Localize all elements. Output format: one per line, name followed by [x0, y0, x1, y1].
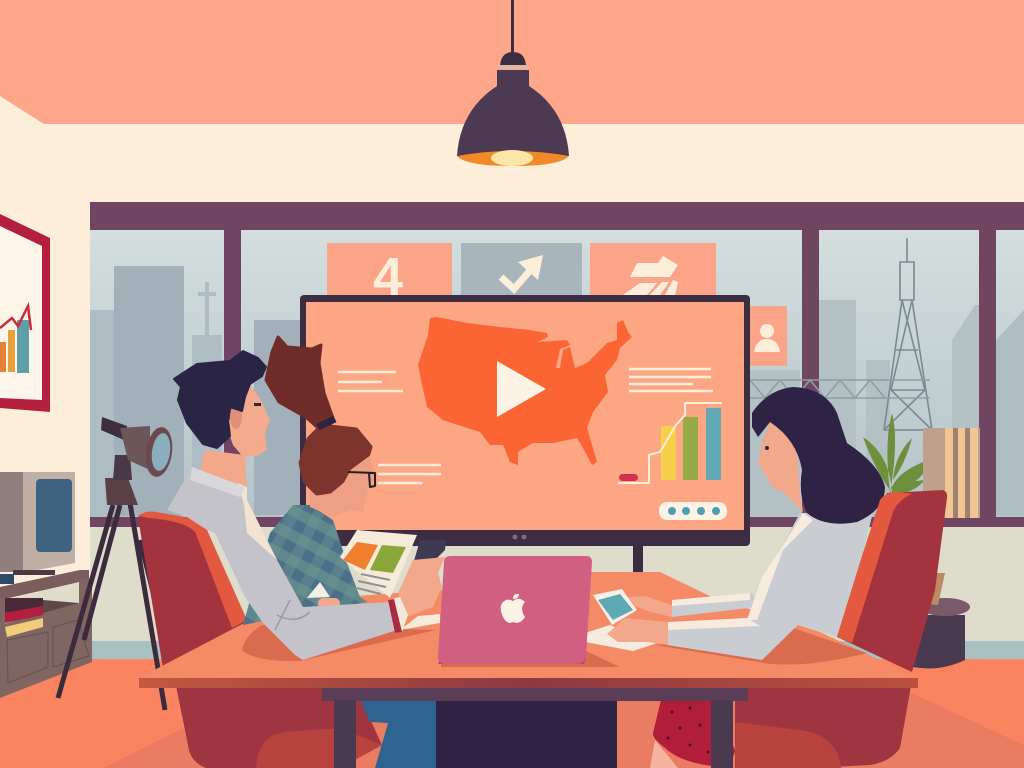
eye [765, 446, 769, 450]
hair band [318, 419, 335, 427]
back sleeve [672, 593, 757, 617]
face [226, 385, 270, 457]
left text lines [338, 372, 403, 391]
sign: check arrow [461, 243, 582, 303]
eye [254, 403, 261, 406]
shirt and sleeve [167, 467, 397, 660]
chair base: left [176, 686, 382, 768]
map of USA [418, 317, 632, 465]
pendant lamp [457, 0, 569, 166]
pill with dots [659, 502, 727, 520]
tablet held by woman [340, 530, 417, 598]
hair [174, 351, 266, 448]
sign: arrow stripes [590, 243, 716, 303]
phone held by woman [410, 540, 446, 575]
ear [230, 405, 242, 429]
sign: person [750, 306, 787, 366]
arm shadows [242, 625, 436, 661]
left chair back [138, 512, 263, 668]
floor [0, 659, 1024, 768]
tablet and phone on right [585, 589, 672, 651]
man's small tablet [400, 614, 440, 630]
chair base: right [735, 686, 911, 768]
front sleeve [667, 600, 800, 660]
hair [752, 387, 885, 524]
person: woman with ponytail [243, 337, 375, 625]
window with city skyline [90, 202, 1024, 527]
neck and face [310, 455, 375, 517]
wall [0, 90, 1024, 690]
ponytail [266, 337, 333, 428]
woman's skirt [653, 700, 735, 766]
glasses [348, 472, 375, 487]
shelf with tv and books [0, 472, 92, 698]
signs behind the screen [327, 243, 787, 366]
cuff [388, 597, 408, 633]
collar [190, 467, 245, 497]
neck [200, 450, 247, 490]
person: woman on right [667, 387, 885, 660]
telescope lamp on tripod [58, 417, 175, 710]
frame [90, 202, 1024, 230]
tv screen [300, 295, 750, 587]
cream highlights [747, 513, 813, 620]
bottom left text lines [378, 465, 441, 483]
sleeve fold [275, 600, 310, 630]
hand holding phone [398, 557, 445, 617]
ceiling [0, 0, 1024, 124]
plaid shirt [243, 505, 368, 625]
lower hand [607, 618, 668, 645]
man's jeans [360, 700, 436, 768]
plant and side table [863, 413, 980, 668]
picture frame with chart [0, 214, 50, 412]
laptop [438, 556, 592, 664]
right chair back [837, 490, 947, 672]
upper hand [628, 596, 672, 617]
face and neck [758, 422, 803, 512]
table [139, 572, 918, 768]
lower wall band [90, 526, 1024, 661]
sign: number 4 [327, 243, 452, 307]
icon: eiffel-style tower [750, 238, 932, 430]
legs under table [360, 700, 735, 768]
sign: number 4: 4 [373, 247, 403, 307]
shirt torso [757, 512, 873, 637]
cream shirt front [238, 483, 277, 560]
bar chart [618, 403, 722, 483]
left chair orange edge [138, 512, 247, 628]
apple logo [501, 594, 525, 623]
play button [497, 361, 546, 417]
right text lines [629, 369, 713, 391]
head hair [301, 427, 370, 493]
person: man [167, 351, 408, 660]
woman's leg [650, 740, 678, 768]
